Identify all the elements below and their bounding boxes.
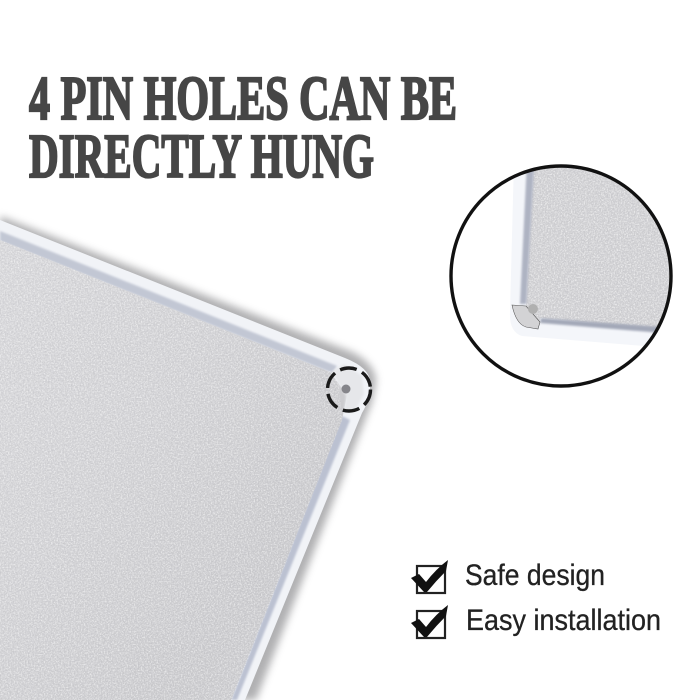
feature: safe design: [411, 559, 605, 593]
feature: easy installation: [411, 604, 661, 638]
frame right shading: [231, 416, 350, 700]
metal sign plate with frame: [0, 216, 376, 700]
inset corner tab: [512, 305, 540, 329]
title: [29, 65, 457, 191]
plate dark grain: [0, 235, 350, 700]
label: Easy installation: [466, 604, 661, 637]
inset ring: [451, 166, 671, 386]
inset dark grain: [527, 168, 669, 324]
inset frame: [510, 174, 652, 346]
plate shadow: [0, 216, 376, 700]
inset plate surface: [526, 168, 670, 328]
inset light grain: [526, 168, 670, 326]
label: Safe design: [465, 559, 605, 592]
inset frame bottom shade: [540, 318, 662, 333]
inset magnified corner: [451, 160, 690, 386]
dashed target circle: [328, 368, 370, 411]
title: 4 PIN HOLES CAN BE: [29, 65, 457, 133]
plate light grain: [0, 235, 350, 700]
inset frame left shade: [520, 160, 534, 304]
inset content: [510, 168, 670, 346]
inset pin hole: [528, 304, 538, 314]
title: DIRECTLY HUNG: [29, 123, 374, 191]
icon: checkbox: [411, 605, 448, 638]
pin hole: [342, 384, 350, 394]
icon: checkbox: [411, 560, 448, 593]
frame top shading: [0, 231, 337, 373]
plate surface: [0, 240, 347, 700]
frame: [0, 220, 370, 700]
corner patch: [332, 364, 364, 412]
